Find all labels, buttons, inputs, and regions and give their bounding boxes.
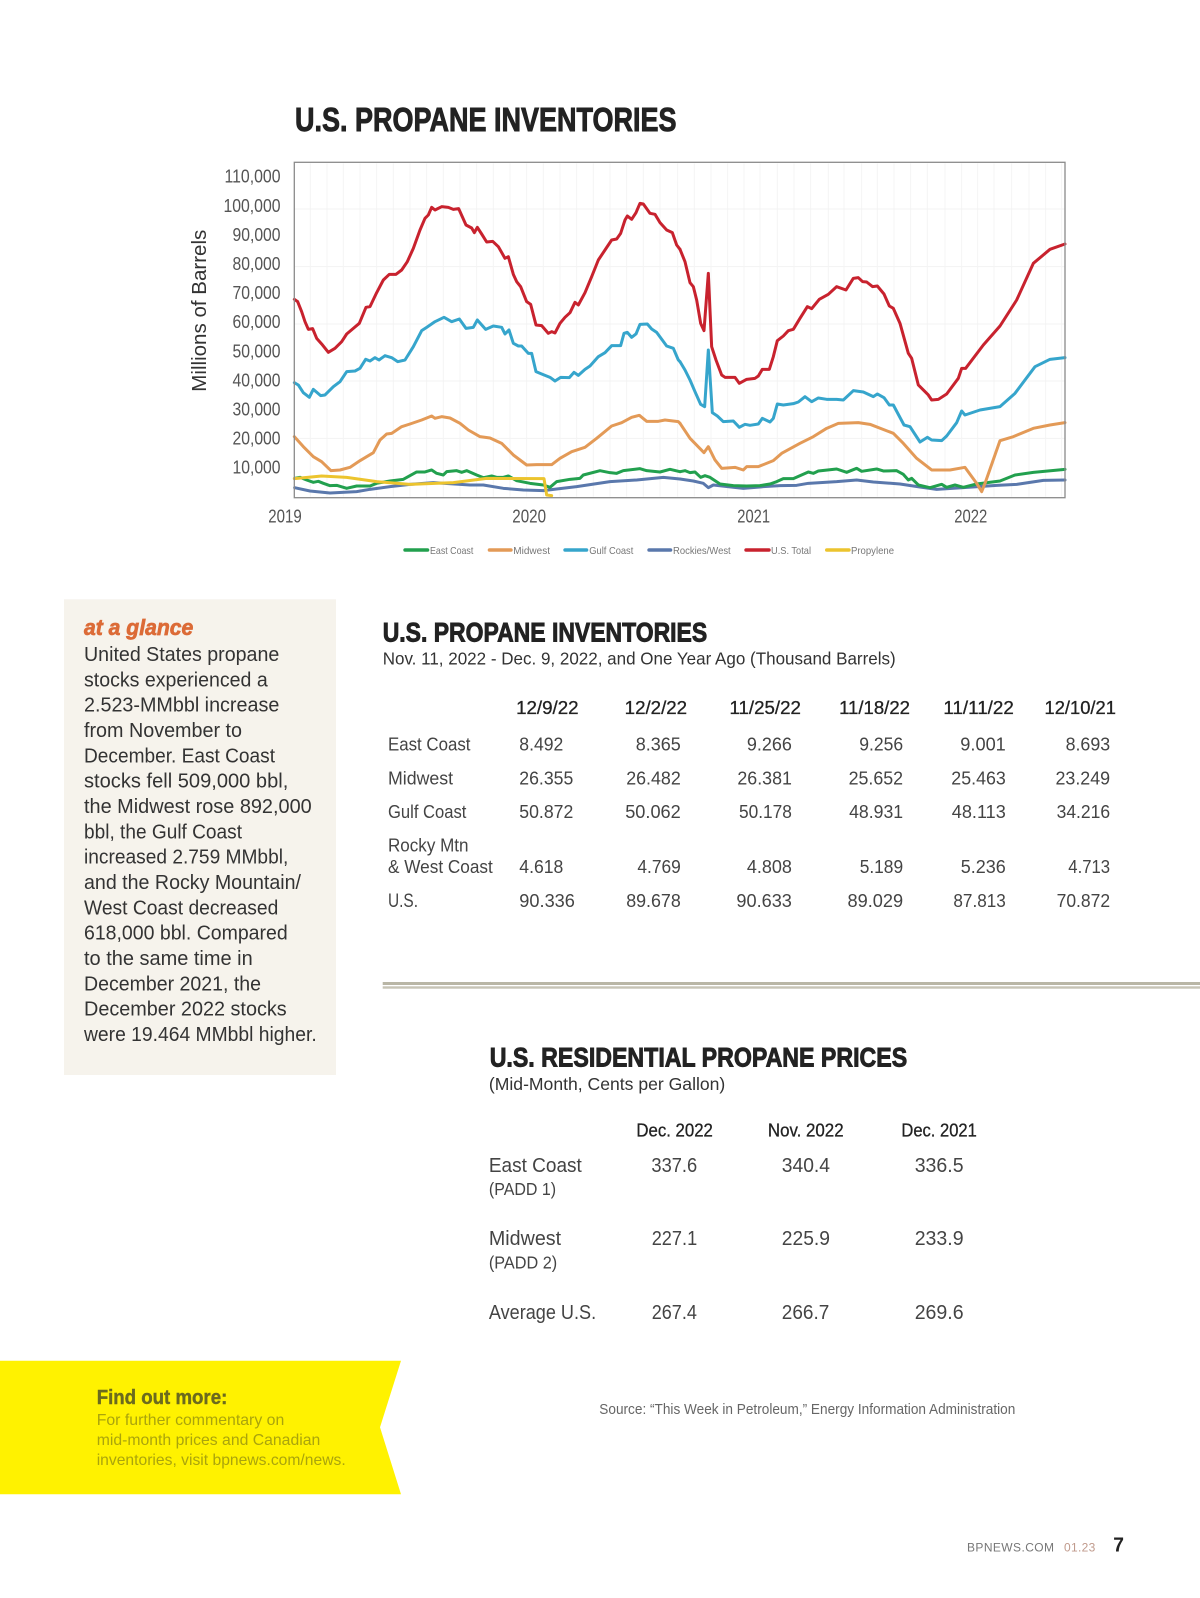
- callout body: inventories, visit bpnews.com/news.: [97, 1452, 346, 1469]
- row: East Coast: 340.4: [782, 1155, 830, 1177]
- column headers: 11/11/22: [943, 697, 1014, 718]
- at a glance body text: from November to: [84, 720, 242, 742]
- legend: Gulf Coast: [589, 545, 633, 557]
- row: East Coast: [388, 734, 1110, 755]
- row: Rocky Mtn and West Coast: 4.618: [519, 856, 563, 877]
- at a glance body text: [83, 644, 317, 1046]
- row: Gulf Coast: 48.113: [952, 801, 1006, 822]
- y axis labels: 40,000: [232, 370, 280, 390]
- series: Midwest: [294, 415, 1065, 492]
- x axis labels: 2020: [512, 506, 546, 526]
- at a glance body text: United States propane: [84, 644, 279, 666]
- row: East Coast: East Coast: [388, 734, 470, 755]
- column headers: [636, 1120, 977, 1140]
- row: Rocky Mtn and West Coast: 4.808: [747, 856, 792, 877]
- row: U.S.: 70.872: [1057, 890, 1110, 911]
- y axis labels: 10,000: [232, 457, 280, 477]
- column headers: 11/18/22: [839, 697, 910, 718]
- at a glance body text: West Coast decreased: [84, 897, 278, 919]
- legend: [403, 545, 894, 557]
- callout body: For further commentary on: [97, 1412, 284, 1429]
- at a glance body text: 618,000 bbl. Compared: [84, 923, 288, 945]
- row: U.S.: 89.029: [848, 890, 903, 911]
- row: Average U.S.: 266.7: [782, 1302, 829, 1324]
- row: East Coast: 337.6: [651, 1155, 697, 1177]
- row: Rocky Mtn and West Coast: 4.713: [1068, 856, 1110, 877]
- y axis labels: 100,000: [224, 196, 280, 216]
- series: Rockies/West: [295, 477, 1065, 493]
- row: East Coast: 8.693: [1066, 734, 1110, 755]
- column headers: [516, 697, 1116, 718]
- column headers: Nov. 2022: [768, 1120, 844, 1141]
- row: U.S.: 90.336: [519, 890, 575, 911]
- row: East Coast: 336.5: [915, 1155, 964, 1177]
- row: Gulf Coast: [388, 801, 1110, 822]
- panel: at a glance: [64, 599, 336, 1075]
- table heading: U.S. RESIDENTIAL PROPANE PRICES: [490, 1043, 907, 1073]
- row: Rocky Mtn and West Coast: & West Coast: [388, 856, 493, 877]
- row: Gulf Coast: Gulf Coast: [388, 801, 466, 822]
- row: U.S.: U.S.: [388, 890, 418, 912]
- column headers: 12/9/22: [516, 697, 579, 718]
- y axis title: Millions of Barrels: [189, 230, 211, 392]
- at a glance body text: stocks experienced a: [84, 669, 269, 691]
- row: Midwest: 26.355: [519, 767, 573, 788]
- y axis labels: 30,000: [232, 399, 280, 419]
- legend: Rockies/West: [673, 545, 731, 557]
- row: East Coast: 8.492: [519, 734, 563, 755]
- chart title: U.S. PROPANE INVENTORIES: [295, 101, 676, 138]
- row: Midwest: 26.381: [737, 767, 792, 788]
- row: U.S.: 90.633: [736, 890, 792, 911]
- at a glance body text: 2.523-MMbbl increase: [84, 695, 279, 717]
- row: Rocky Mtn and West Coast: 5.236: [961, 856, 1006, 877]
- y axis labels: 90,000: [232, 225, 280, 245]
- plot border: [294, 162, 1065, 498]
- at a glance body text: bbl, the Gulf Coast: [84, 821, 242, 843]
- row: Average U.S.: [489, 1302, 964, 1324]
- row: Gulf Coast: 50.872: [519, 801, 573, 822]
- row: East Coast: 9.266: [747, 734, 792, 755]
- row: U.S.: 87.813: [953, 890, 1006, 911]
- row: Average U.S.: 267.4: [652, 1302, 697, 1324]
- legend: East Coast: [430, 545, 473, 557]
- row: Gulf Coast: 50.062: [625, 801, 681, 822]
- row: East Coast: East Coast: [489, 1155, 582, 1177]
- table: U.S. residential propane prices: [489, 1043, 977, 1324]
- row: Rocky Mtn and West Coast: 4.769: [637, 856, 681, 877]
- column headers: Dec. 2022: [636, 1120, 713, 1141]
- row: U.S.: [388, 890, 1110, 912]
- y axis labels: 60,000: [232, 312, 280, 332]
- row: Gulf Coast: 34.216: [1057, 801, 1110, 822]
- table heading: U.S. PROPANE INVENTORIES: [383, 618, 707, 648]
- at a glance body text: to the same time in: [84, 948, 253, 970]
- series: Gulf Coast: [294, 317, 1065, 442]
- at a glance body text: December 2021, the: [84, 973, 261, 995]
- row: Midwest: Midwest: [388, 767, 453, 788]
- row: U.S.: 89.678: [626, 890, 681, 911]
- series: Propylene: [294, 476, 552, 496]
- row: Gulf Coast: 48.931: [849, 801, 903, 822]
- row: Midwest: 25.463: [951, 767, 1006, 788]
- page footer: [967, 1535, 1124, 1557]
- at a glance body text: were 19.464 MMbbl higher.: [83, 1024, 317, 1046]
- row: Midwest: [489, 1228, 964, 1272]
- row: East Coast: 9.256: [859, 734, 903, 755]
- y axis labels: 110,000: [224, 167, 280, 187]
- page footer: 01.23: [1064, 1541, 1096, 1555]
- row: Rocky Mtn and West Coast: [388, 835, 1110, 877]
- column headers: 12/10/21: [1044, 697, 1116, 718]
- row: Midwest: 26.482: [626, 767, 681, 788]
- table subtitle: Nov. 11, 2022 - Dec. 9, 2022, and One Year Ago (Thousand Barrels): [383, 648, 896, 668]
- y axis labels: 20,000: [232, 428, 280, 448]
- at a glance body text: increased 2.759 MMbbl,: [84, 847, 288, 869]
- callout body: mid-month prices and Canadian: [97, 1432, 320, 1449]
- y axis labels: [224, 166, 280, 478]
- table: U.S. propane inventories: [383, 618, 1116, 912]
- page footer: 7: [1113, 1535, 1124, 1557]
- source note: Source: “This Week in Petroleum,” Energy Information Administration: [599, 1402, 1015, 1418]
- column headers: 11/25/22: [730, 697, 801, 718]
- page footer: BPNEWS.COM: [967, 1541, 1054, 1555]
- row: Midwest: 225.9: [782, 1228, 830, 1250]
- column headers: Dec. 2021: [901, 1120, 977, 1141]
- row: Midwest: (PADD 2): [489, 1253, 557, 1273]
- row: Gulf Coast: 50.178: [739, 801, 792, 822]
- at a glance body text: December 2022 stocks: [84, 999, 287, 1021]
- callout heading: Find out more:: [97, 1387, 227, 1409]
- row: East Coast: [489, 1155, 964, 1199]
- row: Average U.S.: Average U.S.: [489, 1302, 596, 1324]
- callout body: [97, 1412, 346, 1469]
- y axis labels: 80,000: [232, 254, 280, 274]
- line chart: propane inventories: [189, 162, 1065, 557]
- row: Rocky Mtn and West Coast: Rocky Mtn: [388, 835, 468, 856]
- table subtitle: (Mid-Month, Cents per Gallon): [489, 1074, 725, 1094]
- column headers: 12/2/22: [625, 697, 687, 718]
- row: East Coast: (PADD 1): [489, 1179, 556, 1199]
- at a glance body text: the Midwest rose 892,000: [84, 796, 312, 818]
- x axis labels: 2019: [268, 506, 302, 526]
- row: Average U.S.: 269.6: [915, 1302, 964, 1324]
- legend: Midwest: [513, 545, 550, 557]
- series: U.S. Total: [294, 203, 1065, 400]
- series: East Coast: [295, 468, 1065, 488]
- legend: Propylene: [851, 545, 894, 557]
- row: Rocky Mtn and West Coast: 5.189: [860, 856, 903, 877]
- row: Midwest: 233.9: [915, 1228, 964, 1250]
- x axis labels: 2022: [954, 506, 987, 526]
- x axis labels: [268, 506, 987, 526]
- row: East Coast: 9.001: [960, 734, 1006, 755]
- at a glance body text: stocks fell 509,000 bbl,: [84, 771, 288, 793]
- x axis labels: 2021: [737, 506, 770, 526]
- row: East Coast: 8.365: [636, 734, 681, 755]
- y axis labels: 70,000: [232, 283, 280, 303]
- row: Midwest: 23.249: [1056, 767, 1110, 788]
- row: Midwest: [388, 767, 1110, 788]
- legend: U.S. Total: [771, 545, 811, 557]
- at a glance body text: and the Rocky Mountain/: [84, 872, 301, 894]
- plot area: [294, 163, 1065, 497]
- row: Midwest: 227.1: [652, 1228, 697, 1250]
- at a glance body text: December. East Coast: [84, 745, 275, 767]
- at a glance heading: at a glance: [84, 615, 193, 640]
- callout: find out more: [0, 1361, 401, 1494]
- row: Midwest: Midwest: [489, 1228, 562, 1250]
- row: Midwest: 25.652: [849, 767, 903, 788]
- y axis labels: 50,000: [232, 341, 280, 361]
